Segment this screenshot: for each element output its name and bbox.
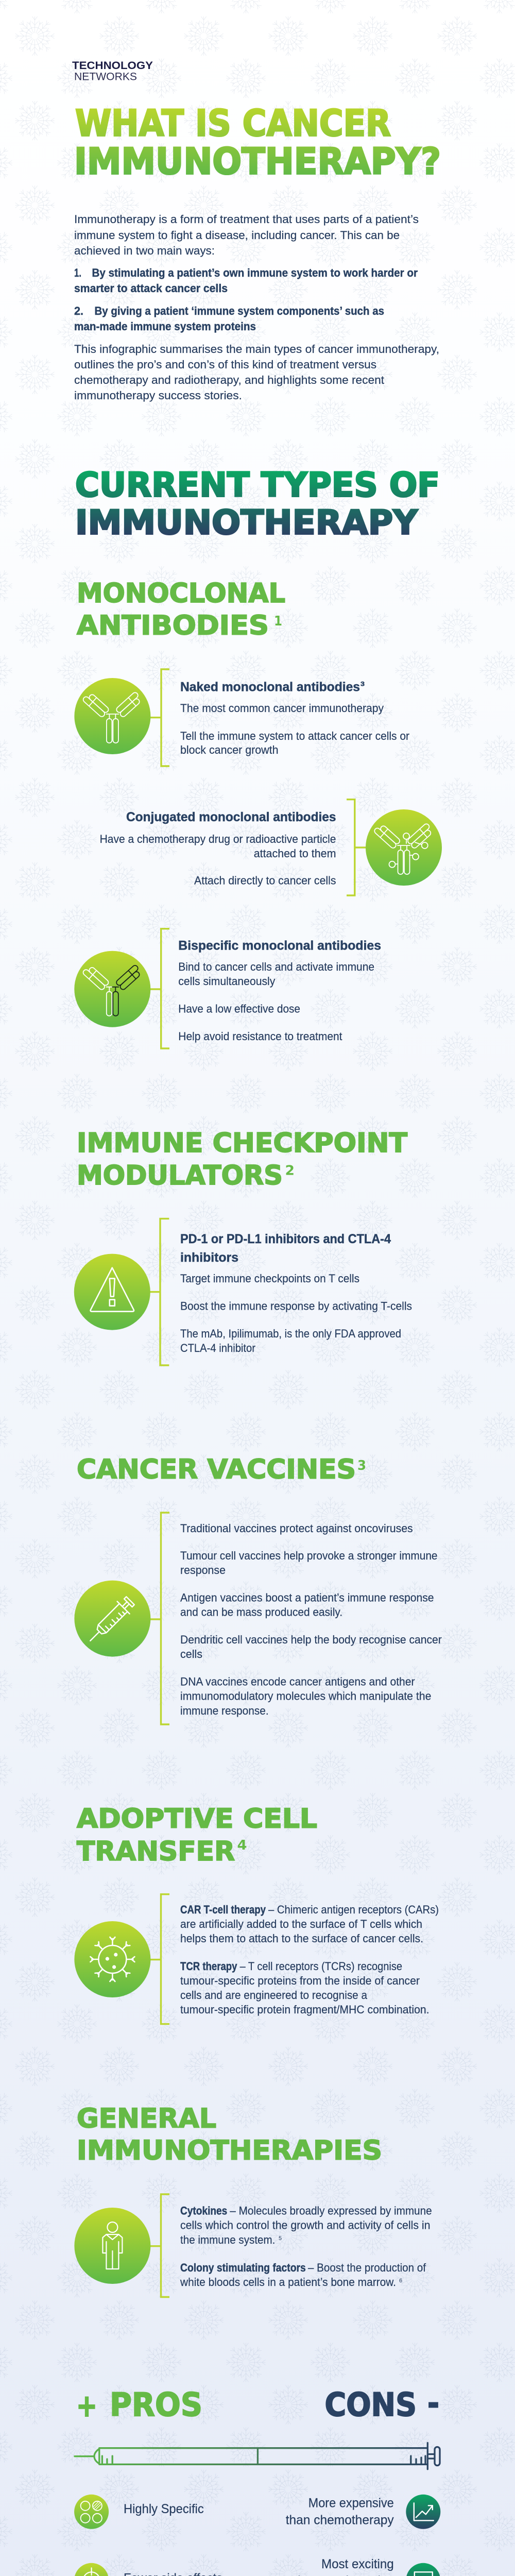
text: cancer vaccines: immunomodulatory molecules which manipulate the (180, 1690, 431, 1703)
bracket (149, 2194, 169, 2297)
panel: adoptive cell transfer (74, 1894, 439, 2024)
text: general immunotherapies: cells which control the growth and activity of cells in (180, 2218, 431, 2232)
heading: cancer vaccines: CANCER VACCINES (77, 1454, 356, 1485)
intro text block: 2. (74, 304, 83, 317)
icon: rising chart (406, 2495, 440, 2529)
text: most exciting immunotherapies: Most exciting (321, 2557, 394, 2571)
text: bispecific monoclonal antibodies: cells simultaneously (178, 975, 275, 988)
heading: general immunotherapies: GENERAL (77, 2104, 216, 2134)
text: conjugated monoclonal antibodies: Have a chemotherapy drug or radioactive particle (100, 833, 336, 845)
icon: long syringe divider (75, 2443, 440, 2469)
title: IMMUNOTHERAPY? (74, 140, 441, 182)
intro text block: chemotherapy and radiotherapy, and highlights some recent (74, 374, 384, 386)
intro text block: This infographic summarises the main types of cancer immunotherapy, (74, 343, 439, 355)
text: general immunotherapies: Colony stimulating factors (180, 2261, 306, 2274)
text: naked monoclonal antibodies: 3 (360, 681, 365, 688)
text: more expensive: than chemotherapy (286, 2513, 394, 2527)
icon: virus cell (74, 1921, 150, 1997)
intro text block: By stimulating a patient’s own immune system to work harder or (92, 266, 418, 279)
icon: question speech bubble (406, 2563, 440, 2576)
panel: conjugated monoclonal antibodies (100, 800, 442, 895)
text: checkpoint inhibitors: PD-1 or PD-L1 inhibitors and CTLA-4 (180, 1232, 391, 1246)
text: checkpoint inhibitors: The mAb, Ipilimumab, is the only FDA approved (180, 1327, 401, 1340)
bracket (149, 929, 169, 1048)
text: cancer vaccines: immune response. (180, 1704, 269, 1717)
text: adoptive cell transfer (180, 1903, 439, 2016)
intro text block: 1. (74, 266, 81, 279)
text: general immunotherapies: Cytokines (180, 2204, 227, 2217)
logo: Technology Networks: NETWORKS (74, 71, 137, 82)
bracket (347, 800, 367, 895)
heading: adoptive cell transfer: TRANSFER (77, 1836, 235, 1867)
text: adoptive cell transfer: – Chimeric antigen receptors (CARs) (268, 1903, 439, 1916)
heading: monoclonal antibodies (77, 578, 285, 641)
text: checkpoint inhibitors: Boost the immune response by activating T-cells (180, 1300, 412, 1313)
text: adoptive cell transfer: cells and are engineered to recognise a (180, 1989, 368, 2002)
title (74, 102, 441, 182)
heading: immune checkpoint modulators: IMMUNE CHECKPOINT (77, 1128, 408, 1159)
text: conjugated monoclonal antibodies (100, 810, 336, 887)
text: adoptive cell transfer: – T cell receptors (TCRs) recognise (240, 1960, 402, 1973)
heading: immune checkpoint modulators: MODULATORS (77, 1160, 283, 1191)
text: bispecific monoclonal antibodies (178, 939, 381, 1043)
intro text block: By giving a patient ‘immune system components’ such as (95, 304, 384, 317)
text: naked monoclonal antibodies (180, 680, 409, 756)
heading: monoclonal antibodies: MONOCLONAL (77, 578, 285, 609)
heading: cons: - (427, 2384, 439, 2422)
bracket (149, 1513, 169, 1724)
bracket (149, 1894, 169, 2024)
text: bispecific monoclonal antibodies: Help avoid resistance to treatment (178, 1030, 342, 1043)
text: adoptive cell transfer: tumour-specific protein fragment/MHC combination. (180, 2003, 430, 2016)
text: checkpoint inhibitors: CTLA-4 inhibitor (180, 1342, 255, 1354)
text: general immunotherapies: 5 (279, 2235, 282, 2242)
logo: Technology Networks (72, 60, 153, 82)
heading: immune checkpoint modulators: 2 (285, 1163, 295, 1179)
text: adoptive cell transfer: tumour-specific proteins from the inside of cancer (180, 1974, 420, 1987)
intro text block: man-made immune system proteins (74, 320, 256, 333)
text: adoptive cell transfer: TCR therapy (180, 1960, 237, 1973)
text: bispecific monoclonal antibodies: Bispecific monoclonal antibodies (178, 939, 381, 953)
text: general immunotherapies: the immune system. (180, 2233, 275, 2246)
panel: cons list (286, 2495, 440, 2576)
text: cancer vaccines: Antigen vaccines boost a patient’s immune response (180, 1591, 434, 1604)
intro text block: Immunotherapy is a form of treatment that uses parts of a patient’s (74, 213, 419, 226)
text: general immunotherapies: 6 (399, 2278, 402, 2284)
bracket (149, 1218, 169, 1365)
intro text block: outlines the pro’s and con’s of this kind of treatment versus (74, 358, 376, 371)
intro text block: immunotherapy success stories. (74, 389, 242, 402)
text: general immunotherapies: white bloods cells in a patient’s bone marrow. (180, 2276, 396, 2289)
icon: bispecific antibody (74, 951, 150, 1027)
text: bispecific monoclonal antibodies: Have a low effective dose (178, 1003, 300, 1015)
intro text block: smarter to attack cancer cells (74, 282, 228, 295)
heading: current types of immunotherapy: IMMUNOTHERAPY (75, 504, 418, 542)
icon: warning triangle (74, 1254, 150, 1330)
text: cancer vaccines: and can be mass produced easily. (180, 1605, 342, 1619)
icon: syringe (74, 1581, 150, 1657)
text: general immunotherapies: – Boost the production of (308, 2261, 426, 2274)
text: cancer vaccines: Tumour cell vaccines help provoke a stronger immune (180, 1549, 438, 1562)
heading: pros (76, 2386, 202, 2424)
text: general immunotherapies (180, 2204, 432, 2289)
intro text block (74, 213, 439, 402)
text: adoptive cell transfer: helps them to attach to the surface of cancer cells. (180, 1932, 423, 1945)
heading: cons: CONS (324, 2386, 417, 2424)
text: cancer vaccines: cells (180, 1648, 202, 1660)
heading: current types of immunotherapy (75, 466, 440, 542)
text: conjugated monoclonal antibodies: attached to them (254, 847, 336, 860)
text: naked monoclonal antibodies: Tell the immune system to attack cancer cells or (180, 730, 409, 742)
text: more expensive: More expensive (308, 2496, 394, 2511)
heading: current types of immunotherapy: CURRENT TYPES OF (75, 466, 440, 505)
panel: general immunotherapies (74, 2194, 432, 2297)
icon: person (74, 2208, 150, 2284)
text: general immunotherapies: – Molecules broadly expressed by immune (230, 2204, 432, 2217)
title: WHAT IS CANCER (75, 102, 391, 144)
text: cancer vaccines: DNA vaccines encode cancer antigens and other (180, 1675, 415, 1688)
heading: adoptive cell transfer: ADOPTIVE CELL (77, 1803, 317, 1834)
text: adoptive cell transfer: are artificially added to the surface of T cells which (180, 1918, 422, 1930)
text: cancer vaccines (180, 1522, 442, 1717)
text: checkpoint inhibitors (180, 1232, 412, 1354)
panel: checkpoint inhibitors (74, 1218, 412, 1365)
icon: antibody (74, 678, 150, 754)
heading: adoptive cell transfer: 4 (237, 1838, 247, 1853)
heading: monoclonal antibodies: ANTIBODIES (77, 610, 269, 641)
heading: immune checkpoint modulators (77, 1128, 408, 1191)
text: naked monoclonal antibodies: block cancer growth (180, 743, 278, 756)
text: naked monoclonal antibodies: Naked monoclonal antibodies (180, 680, 360, 694)
text: checkpoint inhibitors: inhibitors (180, 1250, 238, 1265)
logo: Technology Networks: TECHNOLOGY (72, 60, 153, 72)
heading: pros: PROS (110, 2386, 202, 2424)
panel: naked monoclonal antibodies (74, 669, 409, 766)
text: cancer vaccines: response (180, 1564, 226, 1577)
text: conjugated monoclonal antibodies: Conjugated monoclonal antibodies (126, 810, 336, 824)
heading: general immunotherapies: IMMUNOTHERAPIES (77, 2136, 382, 2166)
panel: bispecific monoclonal antibodies (74, 929, 381, 1048)
bracket (149, 669, 169, 766)
heading: pros: + (76, 2388, 97, 2424)
icon: four circles (74, 2495, 109, 2529)
text: cancer vaccines: Dendritic cell vaccines help the body recognise cancer (180, 1633, 442, 1646)
heading: cancer vaccines: 3 (357, 1458, 366, 1473)
text: conjugated monoclonal antibodies: Attach directly to cancer cells (194, 874, 336, 887)
intro text block: immune system to fight a disease, including cancer. This can be (74, 229, 400, 242)
text: cancer vaccines: Traditional vaccines protect against oncoviruses (180, 1522, 413, 1535)
text: adoptive cell transfer: CAR T-cell therapy (180, 1903, 266, 1916)
intro text block: achieved in two main ways: (74, 244, 215, 257)
text: highly specific: Highly Specific (124, 2502, 204, 2516)
text: most exciting immunotherapies (293, 2557, 394, 2576)
heading: adoptive cell transfer (77, 1803, 317, 1867)
icon: conjugated antibody (366, 809, 442, 886)
icon: target (74, 2563, 109, 2576)
panel: pros list (74, 2495, 227, 2576)
text: naked monoclonal antibodies: The most common cancer immunotherapy (180, 702, 384, 715)
text: bispecific monoclonal antibodies: Bind to cancer cells and activate immune (178, 960, 374, 973)
heading: general immunotherapies (77, 2104, 382, 2166)
text: checkpoint inhibitors: Target immune checkpoints on T cells (180, 1272, 359, 1285)
heading: monoclonal antibodies: 1 (274, 614, 282, 629)
text: more expensive (286, 2496, 394, 2527)
panel: cancer vaccines (74, 1513, 442, 1724)
